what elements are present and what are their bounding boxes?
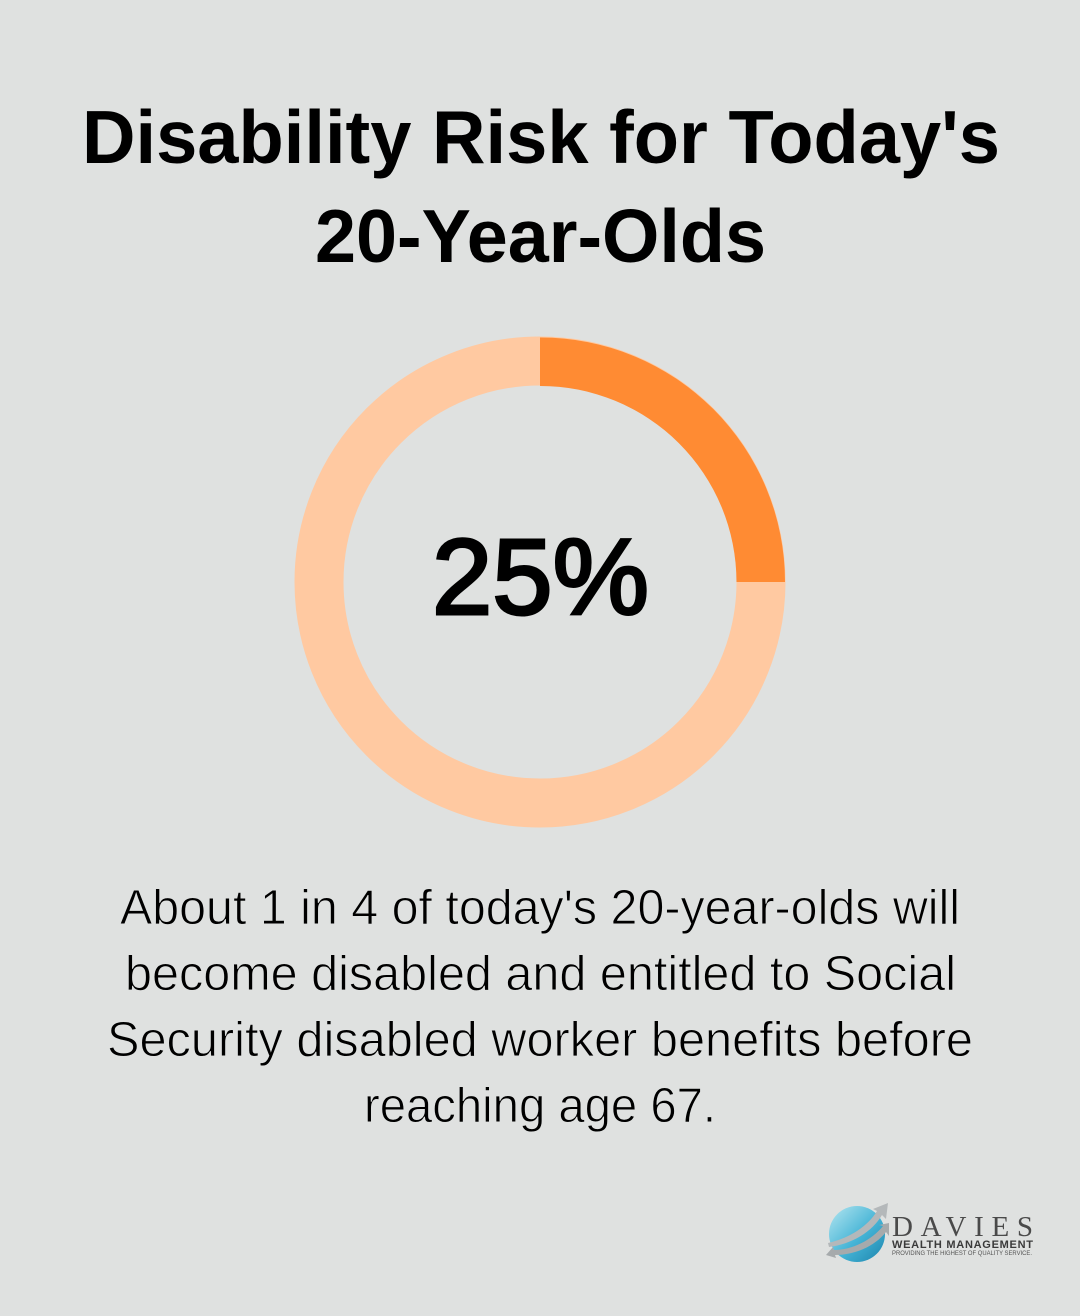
- title: [82, 95, 1000, 278]
- title: Disability Risk for Today's: [82, 95, 1000, 179]
- description text: Security disabled worker benefits before: [107, 1013, 973, 1067]
- description text: About 1 in 4 of today's 20-year-olds will: [120, 881, 960, 935]
- donut chart: 25 percent: [319, 337, 785, 803]
- center value: 25%: [432, 516, 649, 637]
- icon: globe with arrows: [826, 1203, 889, 1262]
- description text: become disabled and entitled to Social: [125, 947, 956, 1001]
- wordmark: DAVIES: [892, 1211, 1033, 1243]
- description text: [107, 881, 973, 1133]
- title: 20-Year-Olds: [315, 194, 766, 278]
- description text: reaching age 67.: [364, 1079, 716, 1133]
- tagline: PROVIDING THE HIGHEST OF QUALITY SERVICE.: [892, 1250, 1032, 1257]
- wordmark subtitle: WEALTH MANAGEMENT: [892, 1239, 1033, 1251]
- logo: Davies Wealth Management: [826, 1203, 1033, 1262]
- highlighted 25 percent segment: [540, 337, 785, 582]
- remaining ring segment: [319, 361, 761, 803]
